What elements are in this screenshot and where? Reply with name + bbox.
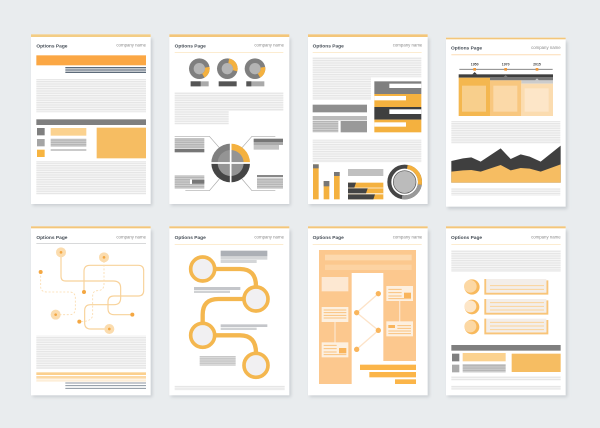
callout bottom left: [175, 175, 219, 191]
list icons: [464, 279, 480, 334]
company name: company name: [116, 43, 147, 48]
light panel: [322, 277, 348, 291]
title: Options Page: [175, 43, 206, 49]
card right bottom: [386, 321, 413, 336]
gray bar: [313, 105, 367, 112]
body text: [36, 79, 146, 112]
donut 1: [189, 58, 210, 79]
ring chart: [389, 167, 420, 197]
page 8: list cards: [446, 226, 567, 397]
dashed routes: [41, 257, 104, 322]
area chart: [451, 146, 561, 183]
bar chart: [313, 164, 340, 199]
orange panel: [512, 354, 561, 372]
orange backdrop: [319, 250, 416, 384]
timeline: 1970: [502, 62, 510, 66]
stripe block: [374, 81, 421, 132]
lower body text: [313, 140, 421, 162]
page 3: charts: [308, 34, 429, 206]
route lines: [61, 252, 144, 329]
card right top: [386, 286, 413, 301]
header bars: [325, 255, 412, 270]
company name: company name: [531, 45, 561, 50]
footer text: [451, 188, 560, 196]
legend labels: [463, 353, 506, 372]
page 5: route map: [31, 226, 152, 397]
callout top right: [242, 136, 283, 150]
company name: company name: [254, 43, 285, 48]
quadrant pie: [211, 143, 251, 183]
callout bottom right: [242, 175, 283, 191]
footer text: [175, 386, 285, 390]
company name: company name: [393, 43, 423, 48]
timeline: 2015: [533, 62, 541, 66]
gray label: [348, 169, 383, 176]
stacked bars: [348, 183, 383, 199]
page 7: flow diagram: [308, 226, 429, 397]
gray text block: [313, 116, 367, 132]
label 3: [221, 324, 267, 330]
banner sub lines: [65, 68, 146, 72]
timeline: [459, 62, 553, 71]
company name: company name: [116, 235, 147, 240]
label 2: [194, 287, 240, 293]
donut 2: [217, 58, 238, 79]
card 1: [484, 279, 548, 295]
page 4: timeline and area chart: [446, 38, 567, 209]
orange banner: [36, 55, 146, 65]
page 6: winding path: [169, 226, 291, 397]
company name: company name: [531, 235, 561, 240]
timeline columns: [459, 72, 553, 116]
timeline: 1950: [471, 62, 479, 66]
page 2: donuts and quadrant pie: [169, 34, 291, 206]
legend squares: [452, 354, 459, 372]
title: Options Page: [313, 43, 344, 49]
donut captions: [191, 81, 264, 86]
company name: company name: [393, 235, 423, 240]
title: Options Page: [451, 46, 482, 52]
gray header bar: [36, 119, 146, 125]
footer text: [451, 376, 561, 390]
orange bars: [360, 365, 416, 384]
gray lines: [65, 383, 146, 388]
legend labels: [51, 128, 86, 151]
body text: [175, 92, 283, 124]
title: Options Page: [313, 235, 344, 241]
title: Options Page: [36, 43, 68, 49]
label 4: [200, 356, 236, 366]
body text: [451, 250, 561, 272]
label 1: [221, 251, 267, 263]
body text: [451, 121, 560, 144]
card left bottom: [322, 342, 348, 357]
title: Options Page: [451, 235, 482, 241]
card 3: [484, 319, 548, 334]
legend squares: [37, 128, 45, 157]
route nodes: [39, 247, 134, 334]
title: Options Page: [36, 235, 68, 241]
callout top left: [175, 136, 219, 152]
step circles: [191, 257, 268, 377]
orange bands: [36, 372, 146, 382]
card 2: [484, 299, 548, 315]
orange panel: [97, 128, 146, 158]
company name: company name: [254, 235, 285, 240]
card left top: [322, 307, 348, 322]
connectors: [335, 294, 400, 349]
donut 3: [245, 58, 265, 79]
node dots: [354, 291, 381, 352]
body text: [313, 57, 421, 100]
title: Options Page: [175, 235, 206, 241]
page 1: text and banners: [31, 34, 152, 206]
body text: [36, 336, 146, 369]
gray header bar: [451, 345, 561, 351]
connector path: [203, 269, 256, 353]
lower body text: [36, 161, 146, 194]
